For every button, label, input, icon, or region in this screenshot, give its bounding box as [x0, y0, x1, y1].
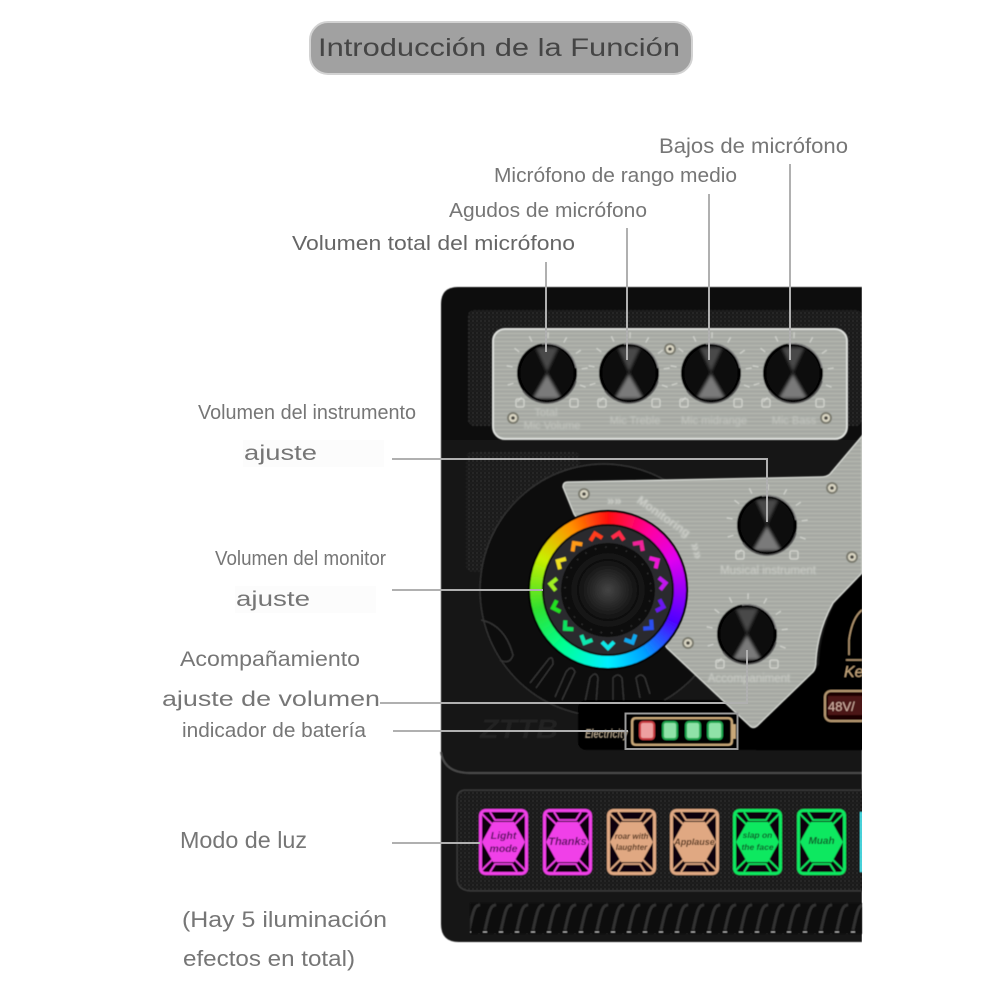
tan microphone outline	[846, 610, 862, 660]
device body	[441, 287, 868, 942]
rainbow ring	[530, 512, 686, 668]
left callout labels: Volumen del monitor	[215, 548, 386, 570]
leader lines	[380, 164, 790, 843]
left callout labels: Volumen del instrumento	[198, 402, 416, 424]
circular housing	[479, 463, 696, 714]
lower left emboss: ZTTB	[479, 714, 558, 744]
left callout labels: indicador de batería	[182, 720, 367, 742]
button: roar with laughter: laughter	[616, 843, 648, 852]
green cell	[708, 722, 722, 739]
green cell	[663, 722, 677, 739]
button: slap on the face	[734, 810, 780, 874]
left callout labels: ajuste	[244, 442, 317, 465]
tick marks	[709, 487, 805, 668]
left callout labels	[162, 402, 416, 971]
screws	[507, 343, 832, 424]
button: Muah	[798, 810, 844, 874]
button: Thanks	[544, 810, 590, 874]
printed labels: Musical instrument	[720, 565, 817, 577]
slanted vent ridges	[470, 903, 862, 934]
panel printed labels: Mic Treble	[610, 415, 660, 427]
upper band	[442, 288, 862, 440]
carbon recess left	[466, 452, 580, 572]
top callout labels: Volumen total del micrófono	[292, 233, 575, 255]
electricity label: Electricity	[585, 726, 629, 741]
panel printed labels: Total	[534, 407, 558, 419]
central dial	[561, 543, 655, 637]
left callout labels: (Hay 5 iluminación	[182, 907, 387, 932]
button: Applause: Applause	[673, 837, 715, 847]
knob: musical instrument	[737, 495, 797, 555]
panel printed labels: Mic Volume	[524, 420, 580, 432]
chevron lights	[550, 532, 666, 648]
printed labels: Accompaniment	[708, 673, 791, 685]
knob: mic midrange	[681, 343, 741, 403]
panel printed labels	[524, 407, 817, 432]
panel printed labels: Mic midrange	[681, 415, 747, 427]
knob: total mic volume	[517, 343, 577, 403]
knob: mic bass	[763, 343, 823, 403]
left callout labels: Acompañamiento	[180, 648, 360, 671]
right display window	[756, 573, 870, 750]
button: Light mode: mode	[489, 843, 518, 855]
dark inner ring	[543, 525, 673, 655]
red cell	[640, 722, 654, 739]
48V indicator: 48V/	[828, 699, 855, 714]
top callout labels: Micrófono de rango medio	[494, 165, 737, 187]
top callout labels: Agudos de micrófono	[449, 200, 647, 222]
left callout labels: efectos en total)	[183, 946, 355, 971]
printed labels: »»	[607, 493, 621, 508]
button: slap on the face: slap on	[743, 830, 772, 840]
battery indicator	[585, 718, 736, 745]
silver monitoring panel	[563, 436, 862, 728]
button: roar with laughter: roar with	[615, 832, 649, 841]
cut-off cyan button	[860, 812, 862, 872]
button: slap on the face: the face	[741, 842, 774, 852]
left callout labels: ajuste	[236, 588, 310, 611]
left callout labels: Modo de luz	[180, 827, 307, 853]
printed labels: Monitoring	[634, 493, 693, 540]
button: Thanks: Thanks	[548, 836, 587, 848]
printed labels: »»	[686, 541, 707, 561]
tan logo text: Ke	[844, 664, 864, 681]
screws	[578, 482, 858, 649]
knob: mic treble	[599, 343, 659, 403]
button: Applause	[672, 810, 718, 874]
light mode buttons panel	[457, 790, 870, 891]
battery outline	[632, 718, 732, 745]
lower body divider	[441, 752, 862, 773]
title pill	[310, 22, 692, 74]
knob: accompaniment	[717, 604, 777, 664]
panel printed labels: Mic Bass	[772, 415, 817, 427]
title pill: Introducción de la Función	[318, 34, 680, 62]
RGB monitor ring	[528, 510, 688, 670]
button: Light mode: Light	[491, 830, 517, 842]
top callout labels	[292, 135, 848, 255]
green cell	[686, 722, 700, 739]
button: Muah: Muah	[808, 836, 835, 847]
lower body dark strip	[578, 700, 868, 750]
battery highlight box	[626, 714, 738, 749]
printed labels	[607, 493, 817, 685]
faint label backgrounds	[235, 440, 384, 613]
48V indicator	[825, 691, 870, 721]
top callout labels: Bajos de micrófono	[659, 135, 848, 158]
tick marks	[509, 335, 831, 407]
top silver panel with four mic knobs	[493, 329, 847, 439]
button: roar with laughter	[608, 810, 654, 874]
housing slots	[481, 620, 650, 704]
button: Light mode	[480, 810, 526, 874]
left callout labels: ajuste de volumen	[162, 688, 380, 711]
carbon recess behind top panel	[468, 310, 862, 426]
